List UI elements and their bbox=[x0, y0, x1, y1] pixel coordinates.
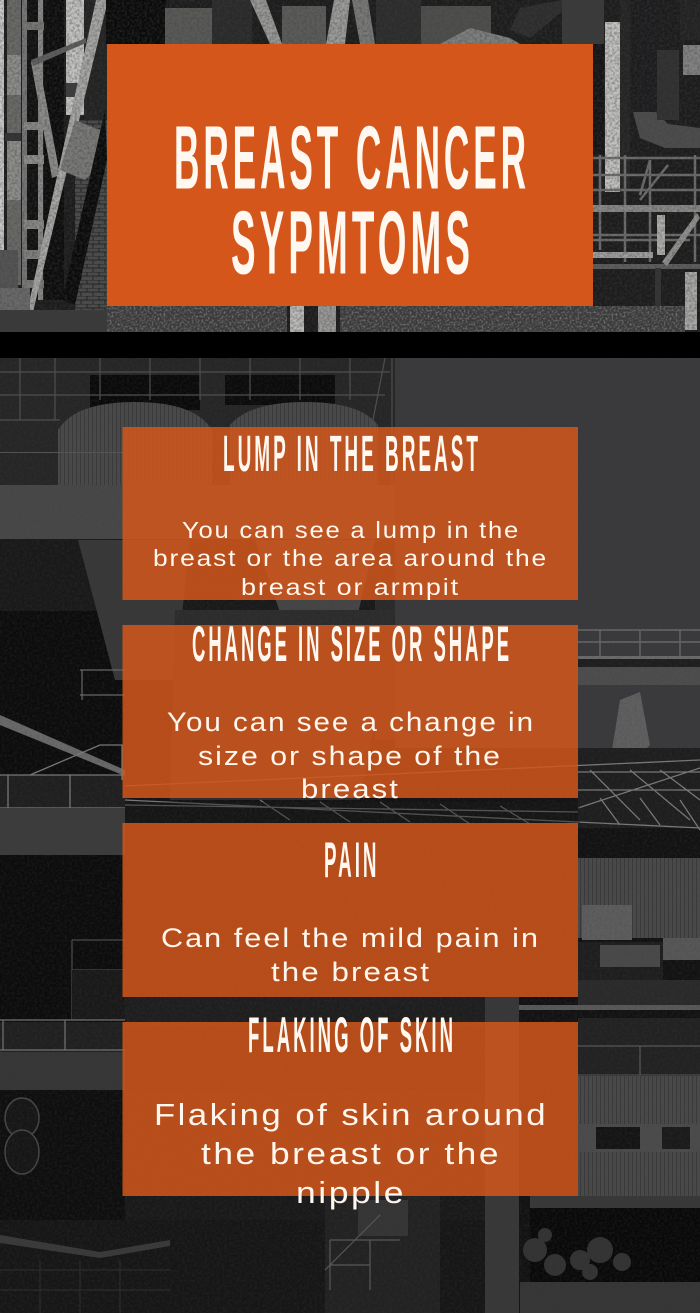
text block: lump description: breast or armpit bbox=[241, 574, 460, 600]
text block: pain description bbox=[161, 923, 540, 987]
panel: change in size or shape bbox=[122, 616, 578, 804]
text block: flaking description bbox=[154, 1097, 548, 1210]
title panel bbox=[107, 44, 593, 306]
panel: pain bbox=[122, 823, 578, 997]
text block: flaking description: nipple bbox=[296, 1175, 406, 1210]
text block: change description bbox=[167, 707, 535, 804]
text block: pain description: the breast bbox=[271, 957, 431, 987]
text block: change description: breast bbox=[301, 774, 400, 804]
text block: flaking description: Flaking of skin around bbox=[154, 1097, 548, 1132]
panel: flaking of skin bbox=[122, 1007, 578, 1210]
header photo: industrial plant bbox=[0, 0, 700, 332]
text block: pain description: Can feel the mild pain in bbox=[161, 923, 540, 953]
panel: lump in the breast bbox=[122, 425, 578, 600]
black divider band bbox=[0, 332, 700, 358]
text block: lump description: You can see a lump in the bbox=[182, 517, 520, 543]
text block: change description: You can see a change in bbox=[167, 707, 535, 737]
text block: lump description bbox=[153, 517, 548, 600]
lower photo: darkened factory bbox=[0, 358, 700, 1313]
text block: flaking description: the breast or the bbox=[201, 1136, 501, 1171]
text block: change description: size or shape of the bbox=[198, 741, 502, 771]
panel: pain: PAIN bbox=[324, 832, 380, 888]
text block: lump description: breast or the area around the bbox=[153, 545, 548, 571]
